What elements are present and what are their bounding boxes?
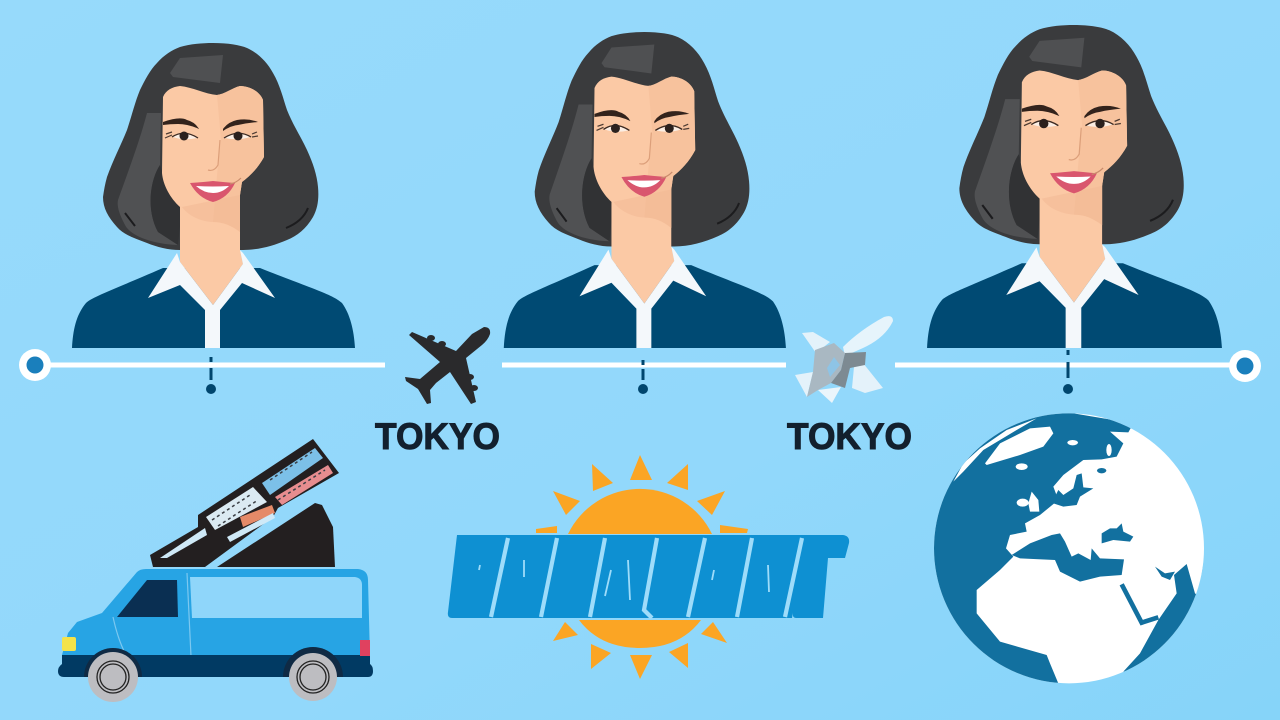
van lower band: [58, 655, 373, 677]
rack: [150, 439, 339, 567]
person 1 portrait: [72, 43, 355, 348]
icon: globe: [934, 413, 1204, 684]
person 3 portrait: [927, 25, 1222, 348]
marker 2: [638, 360, 648, 394]
timeline: [19, 349, 1261, 394]
van cab window: [117, 580, 178, 617]
banner: stylised blue block lettering: [448, 535, 849, 618]
timeline start node: [19, 349, 51, 381]
rear wheel: [283, 647, 343, 701]
icon: faded airplane: [795, 316, 893, 403]
ocean: [934, 413, 1203, 683]
marker 1: [206, 357, 216, 394]
icon: dark airplane: [405, 327, 490, 404]
label: TOKYO right: TOKYO: [787, 416, 912, 457]
person 2 portrait: [504, 32, 786, 348]
icon: van with rooftop rack: [58, 439, 373, 702]
icon: sun: [536, 455, 748, 679]
headlight: [62, 637, 76, 651]
land masses: [953, 418, 1112, 512]
taillight: [360, 640, 370, 656]
front wheel: [84, 648, 142, 702]
label: TOKYO left: TOKYO: [375, 416, 500, 457]
van body: [62, 569, 370, 657]
van side window: [190, 577, 362, 618]
timeline end node: [1229, 350, 1261, 382]
marker 3: [1063, 350, 1073, 394]
